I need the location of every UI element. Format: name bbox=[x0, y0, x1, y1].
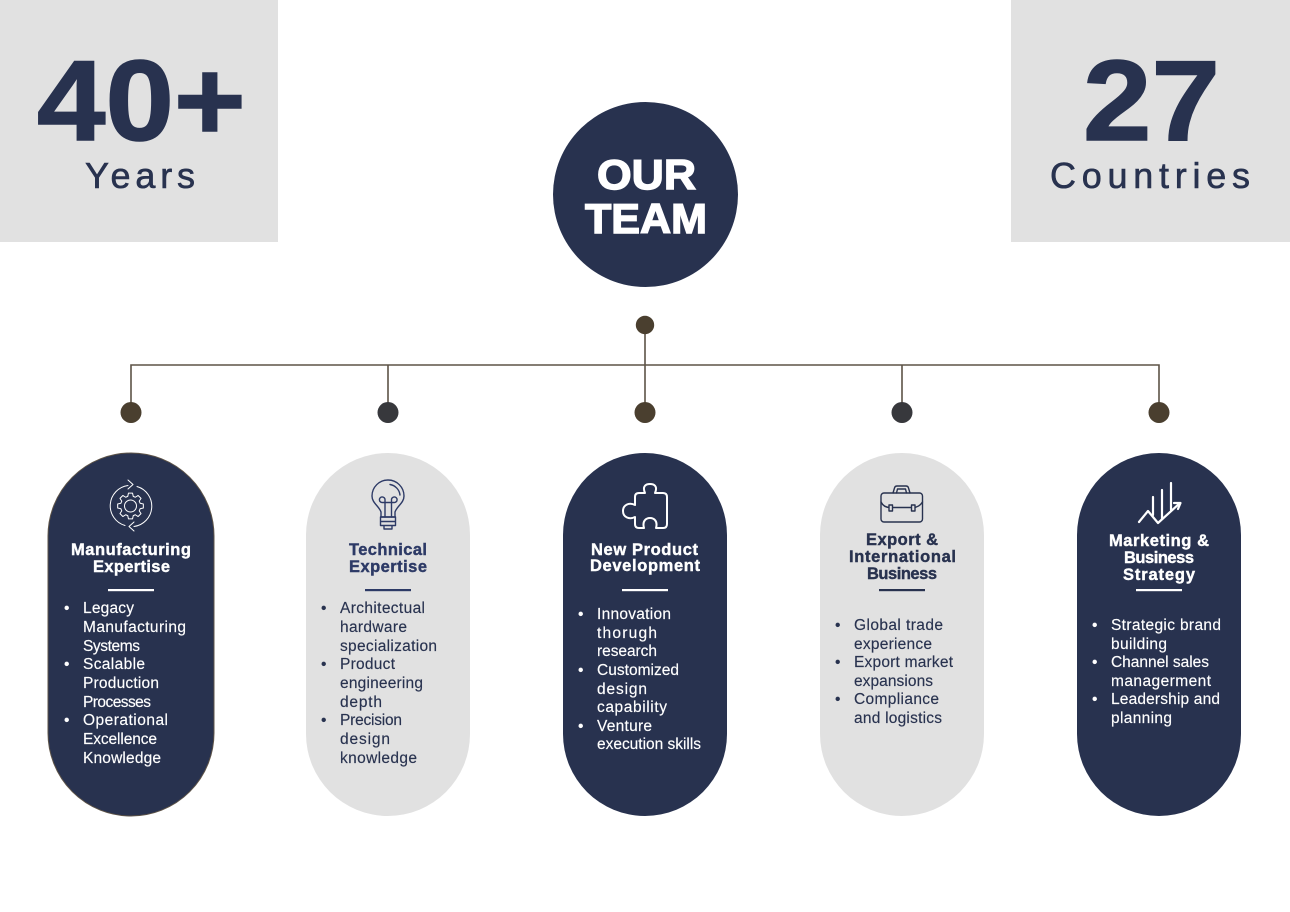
stat panel: 27 countries: Countries bbox=[1050, 155, 1250, 196]
bullet list: managerment bbox=[1111, 673, 1212, 690]
bullet list: • bbox=[321, 712, 326, 729]
bullet list: thorugh bbox=[597, 625, 657, 642]
bullet list: • bbox=[1092, 691, 1097, 708]
bullet list: Manufacturing bbox=[83, 619, 186, 636]
bullet list bbox=[1092, 617, 1221, 727]
bullet list: expansions bbox=[854, 673, 933, 690]
heading: Business bbox=[1124, 549, 1194, 567]
bullet list: • bbox=[321, 600, 326, 617]
title circle: our team: TEAM bbox=[585, 195, 707, 242]
icon: puzzle piece bbox=[623, 484, 667, 528]
heading bbox=[1109, 532, 1209, 584]
bullet list: Venture bbox=[597, 718, 652, 735]
icon: briefcase bbox=[881, 486, 922, 522]
divider bbox=[1136, 589, 1182, 591]
bullet list: planning bbox=[1111, 710, 1172, 727]
bullet list: knowledge bbox=[340, 750, 417, 767]
bullet list bbox=[321, 600, 437, 767]
bullet list: Production bbox=[83, 675, 159, 692]
bullet list: Global trade bbox=[854, 617, 943, 634]
heading: Export & bbox=[866, 531, 938, 549]
heading bbox=[590, 541, 700, 575]
divider bbox=[365, 589, 411, 591]
bullet list: • bbox=[1092, 654, 1097, 671]
bullet list: Innovation bbox=[597, 606, 671, 623]
bullet list: • bbox=[835, 617, 840, 634]
bullet list: • bbox=[64, 656, 69, 673]
connector tree bbox=[120, 316, 1170, 423]
divider bbox=[879, 589, 925, 591]
icon: gear with cycle arrows bbox=[110, 480, 152, 531]
bullet list: Architectual bbox=[340, 600, 425, 617]
bullet list: • bbox=[835, 654, 840, 671]
bullet list: depth bbox=[340, 694, 382, 711]
bullet list: Processes bbox=[83, 694, 151, 711]
heading: Strategy bbox=[1123, 566, 1196, 584]
bullet list: hardware bbox=[340, 619, 407, 636]
bullet list: specialization bbox=[340, 638, 437, 655]
bullet list: • bbox=[64, 600, 69, 617]
title circle: our team bbox=[553, 102, 738, 287]
bullet list: Excellence bbox=[83, 731, 157, 748]
bullet list: Legacy bbox=[83, 600, 134, 617]
bullet list: • bbox=[578, 606, 583, 623]
bullet list: Operational bbox=[83, 712, 168, 729]
panel: export and international business bbox=[820, 453, 984, 816]
bullet list: • bbox=[578, 718, 583, 735]
bullet list: design bbox=[597, 681, 647, 698]
heading bbox=[849, 531, 956, 583]
bullet list: Customized bbox=[597, 662, 679, 679]
bullet list: • bbox=[578, 662, 583, 679]
bullet list: design bbox=[340, 731, 390, 748]
heading: Marketing & bbox=[1109, 532, 1209, 550]
heading: Business bbox=[867, 565, 937, 583]
bullet list: Knowledge bbox=[83, 750, 161, 767]
bullet list bbox=[835, 617, 954, 727]
bullet list: • bbox=[835, 691, 840, 708]
bullet list: building bbox=[1111, 636, 1167, 653]
stat panel: 40+ years bbox=[0, 0, 278, 242]
bullet list: Leadership and bbox=[1111, 691, 1220, 708]
bullet list: research bbox=[597, 643, 657, 660]
icon: growth chart bbox=[1139, 483, 1180, 523]
heading: Manufacturing bbox=[71, 541, 191, 559]
heading: International bbox=[849, 548, 956, 566]
bullet list: and logistics bbox=[854, 710, 942, 727]
bullet list: Product bbox=[340, 656, 396, 673]
bullet list: Export market bbox=[854, 654, 954, 671]
bullet list: capability bbox=[597, 699, 667, 716]
bullet list: • bbox=[321, 656, 326, 673]
bullet list bbox=[578, 606, 701, 753]
bullet list: Compliance bbox=[854, 691, 939, 708]
bullet list: experience bbox=[854, 636, 932, 653]
bullet list: engineering bbox=[340, 675, 423, 692]
bullet list: Strategic brand bbox=[1111, 617, 1221, 634]
bullet list: Systems bbox=[83, 638, 140, 655]
divider bbox=[108, 589, 154, 591]
bullet list: • bbox=[1092, 617, 1097, 634]
heading: New Product bbox=[591, 541, 698, 559]
heading: Expertise bbox=[93, 558, 170, 576]
panel: new product development bbox=[563, 453, 727, 816]
stat panel: 27 countries bbox=[1011, 0, 1290, 242]
bullet list: Scalable bbox=[83, 656, 145, 673]
divider bbox=[622, 589, 668, 591]
heading: Expertise bbox=[349, 558, 427, 576]
heading: Technical bbox=[349, 541, 427, 559]
bullet list: Channel sales bbox=[1111, 654, 1209, 671]
heading bbox=[349, 541, 427, 576]
bullet list: Precision bbox=[340, 712, 402, 729]
panel: marketing and business strategy bbox=[1077, 453, 1241, 816]
bullet list bbox=[64, 600, 186, 767]
heading: Development bbox=[590, 557, 700, 575]
icon: light bulb bbox=[372, 480, 404, 529]
title circle: our team: OUR bbox=[597, 151, 696, 198]
bullet list: execution skills bbox=[597, 736, 701, 753]
stat panel: 40+ years: Years bbox=[85, 155, 195, 196]
panel: technical expertise bbox=[306, 453, 470, 816]
heading bbox=[71, 541, 191, 576]
panel: manufacturing expertise bbox=[48, 453, 214, 816]
stat panel: 27 countries: 27 bbox=[1083, 38, 1220, 165]
stat panel: 40+ years: 40+ bbox=[37, 38, 246, 165]
bullet list: • bbox=[64, 712, 69, 729]
